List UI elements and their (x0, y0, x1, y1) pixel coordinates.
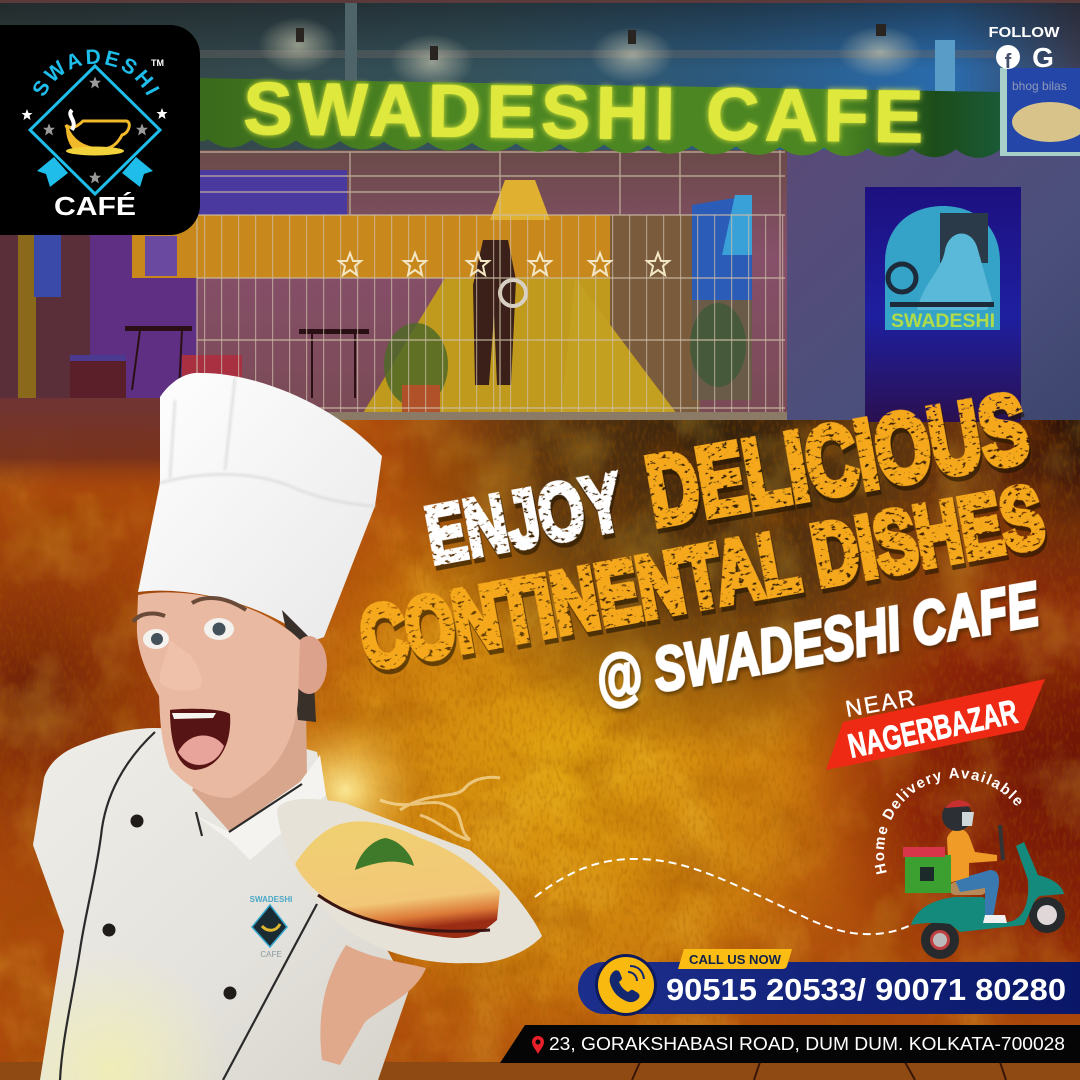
mouth (170, 709, 230, 770)
logo stars (22, 76, 168, 184)
blue bar (578, 962, 1080, 1014)
chef figure (30, 373, 542, 1080)
cafe word: CAFÉ (54, 191, 136, 221)
follow block (988, 25, 1060, 73)
delivery route dashed line (535, 859, 911, 934)
logo arc text: SWADESHI (33, 50, 160, 96)
green awning sign (195, 78, 1000, 158)
scooter wheels (921, 921, 959, 959)
seat (950, 882, 986, 895)
call block: CALL US NOW (689, 952, 782, 967)
eyes (143, 618, 234, 649)
hat band shadow (160, 378, 375, 506)
arm (320, 945, 426, 1065)
address text: 23, GORAKSHABASI ROAD, DUM DUM. KOLKATA-700028 (549, 1034, 1065, 1054)
bhog bilas sign: bhog bilas (1012, 79, 1067, 93)
neck (192, 700, 307, 832)
upper wall (0, 0, 1080, 155)
fairy light stars (339, 253, 669, 275)
trademark: TM (151, 58, 164, 68)
scooter rider (903, 800, 1065, 959)
icon: facebook: f (1005, 51, 1012, 73)
rider legs (955, 870, 999, 918)
face (137, 592, 300, 798)
basil (355, 838, 414, 870)
person behind grille (473, 240, 516, 385)
cafe building photo (0, 0, 1080, 422)
phone numbers: 90515 20533/ 90071 80280 (666, 972, 1066, 1007)
headline word: enjoy: ENJOY (419, 456, 630, 582)
interior back wall (197, 150, 787, 418)
coffee cup (66, 110, 129, 156)
delivery box (905, 855, 951, 893)
address bar (500, 1025, 1080, 1063)
scooter body (911, 842, 1064, 932)
bhog bilas sign (1000, 68, 1080, 156)
nose (160, 640, 202, 691)
jacket logo (250, 895, 292, 959)
logo ribbons (37, 157, 153, 187)
phone icon (595, 954, 657, 1016)
eyebrows (133, 598, 246, 622)
swadeshi wall poster: SWADESHI (891, 311, 995, 332)
yellow wall shape (360, 278, 700, 418)
follow block: FOLLOW (988, 25, 1060, 41)
rider torso (947, 829, 997, 883)
icon: map pin (532, 1036, 544, 1054)
buttons (130, 814, 144, 828)
blue door (692, 195, 752, 300)
handlebar (1000, 825, 1003, 860)
wooden floor (0, 1062, 1080, 1080)
ear and hair (282, 610, 316, 722)
grille (197, 150, 788, 420)
flame wisps (260, 705, 500, 875)
wall lamps (258, 17, 338, 73)
logo badge (0, 25, 200, 235)
logo diamond (30, 66, 160, 194)
swadeshi wall poster (865, 187, 1021, 422)
jacket logo: CAFE (260, 950, 282, 959)
headline (353, 372, 1051, 716)
wall art poster left (34, 235, 61, 297)
plate (277, 799, 542, 963)
jacket (33, 728, 409, 1080)
yellow band (132, 215, 610, 278)
collar (195, 755, 326, 860)
tables and crate (126, 327, 191, 390)
call now tag (678, 949, 792, 969)
near nagerbazar tag: NEAR (843, 684, 919, 722)
home delivery arc text: Home Delivery Available (874, 768, 1022, 874)
red ribbon (826, 679, 1045, 770)
right wall (780, 150, 1080, 420)
left stairs fade (0, 398, 200, 498)
piping (60, 732, 317, 1080)
jacket logo: SWADESHI (250, 895, 292, 904)
neon cafe name: SWADESHI CAFE (243, 67, 924, 158)
left wall (0, 230, 200, 400)
helmet (942, 801, 972, 831)
food (295, 821, 500, 938)
icon: google: G (1032, 42, 1054, 73)
call block (578, 949, 1080, 1016)
hat (138, 373, 382, 642)
plants (384, 323, 448, 407)
